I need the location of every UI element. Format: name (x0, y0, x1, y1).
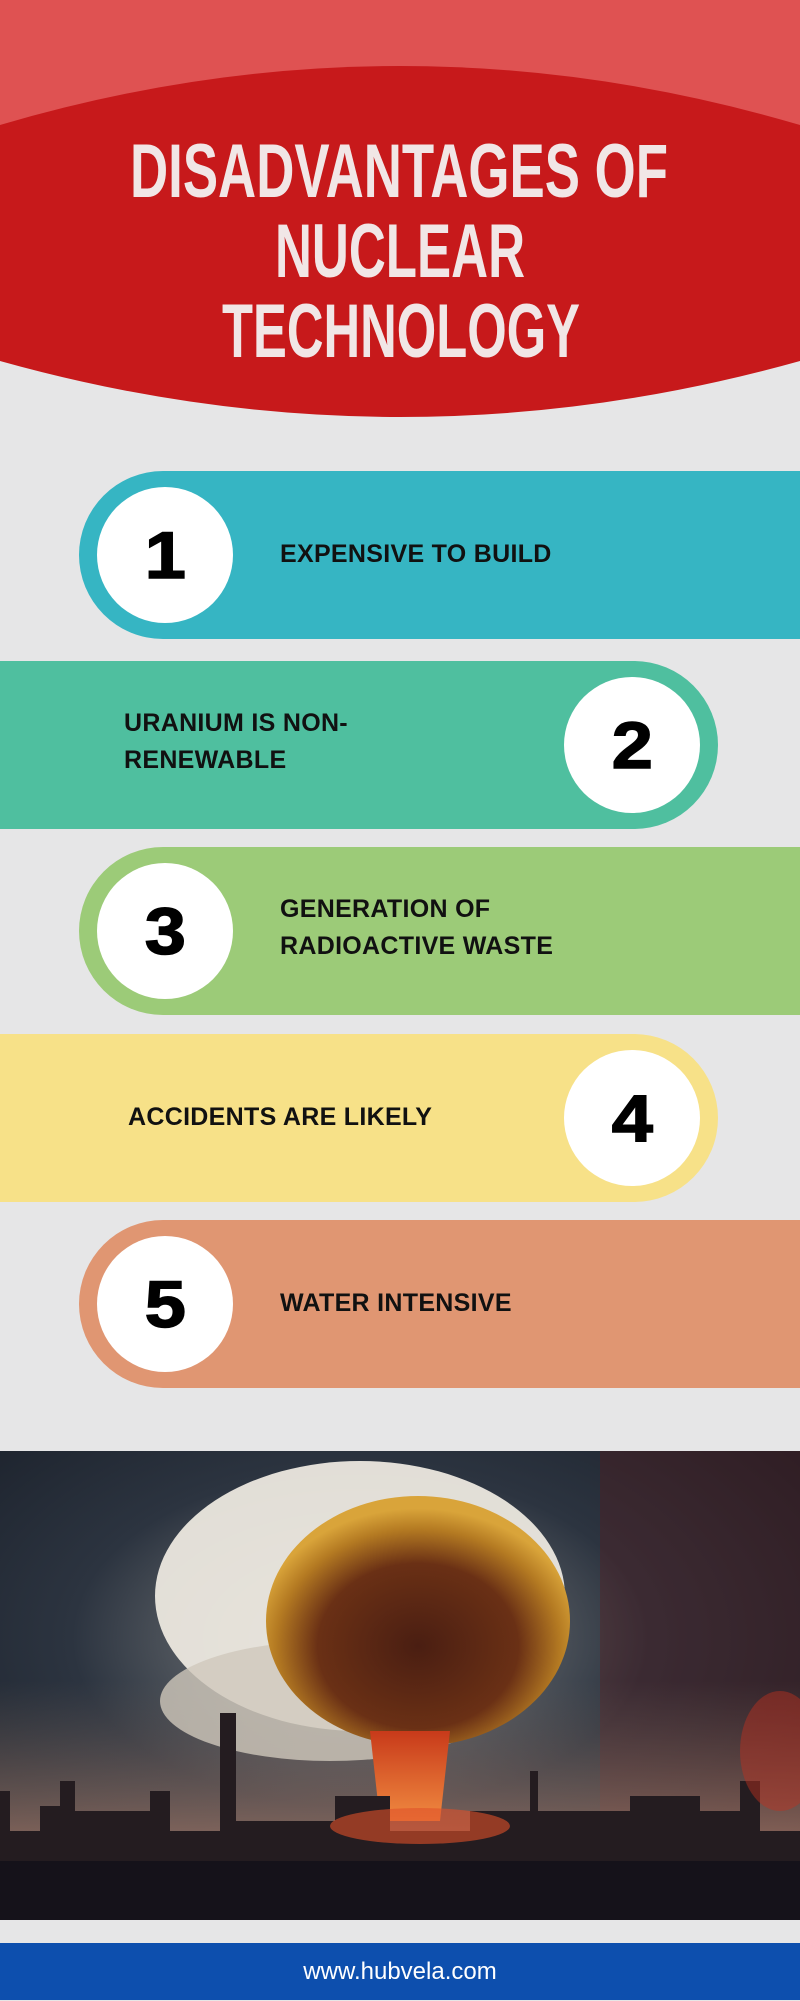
illustration: mushroom cloud over city (0, 1451, 800, 1920)
item 1: 1 (144, 518, 186, 592)
item 2: 2 (611, 708, 653, 782)
item 2 (0, 661, 718, 829)
item 2: URANIUM IS NON- (124, 709, 348, 737)
item 2: RENEWABLE (124, 746, 286, 774)
title: NUCLEAR (275, 209, 525, 294)
item 1 (79, 471, 800, 639)
item 3 (79, 847, 800, 1015)
item 3: RADIOACTIVE WASTE (280, 932, 553, 960)
footer (0, 1943, 800, 2000)
item 4: ACCIDENTS ARE LIKELY (128, 1103, 432, 1131)
header (0, 0, 800, 417)
item 5: 5 (144, 1267, 186, 1341)
title: TECHNOLOGY (222, 289, 580, 374)
item 1: EXPENSIVE TO BUILD (280, 540, 552, 568)
footer: www.hubvela.com (303, 1958, 497, 1985)
item 3: GENERATION OF (280, 895, 490, 923)
item 3: 3 (144, 894, 186, 968)
item 4 (0, 1034, 718, 1202)
title (130, 129, 668, 374)
item 5 (79, 1220, 800, 1388)
item 5: WATER INTENSIVE (280, 1289, 512, 1317)
item 4: 4 (611, 1081, 653, 1155)
